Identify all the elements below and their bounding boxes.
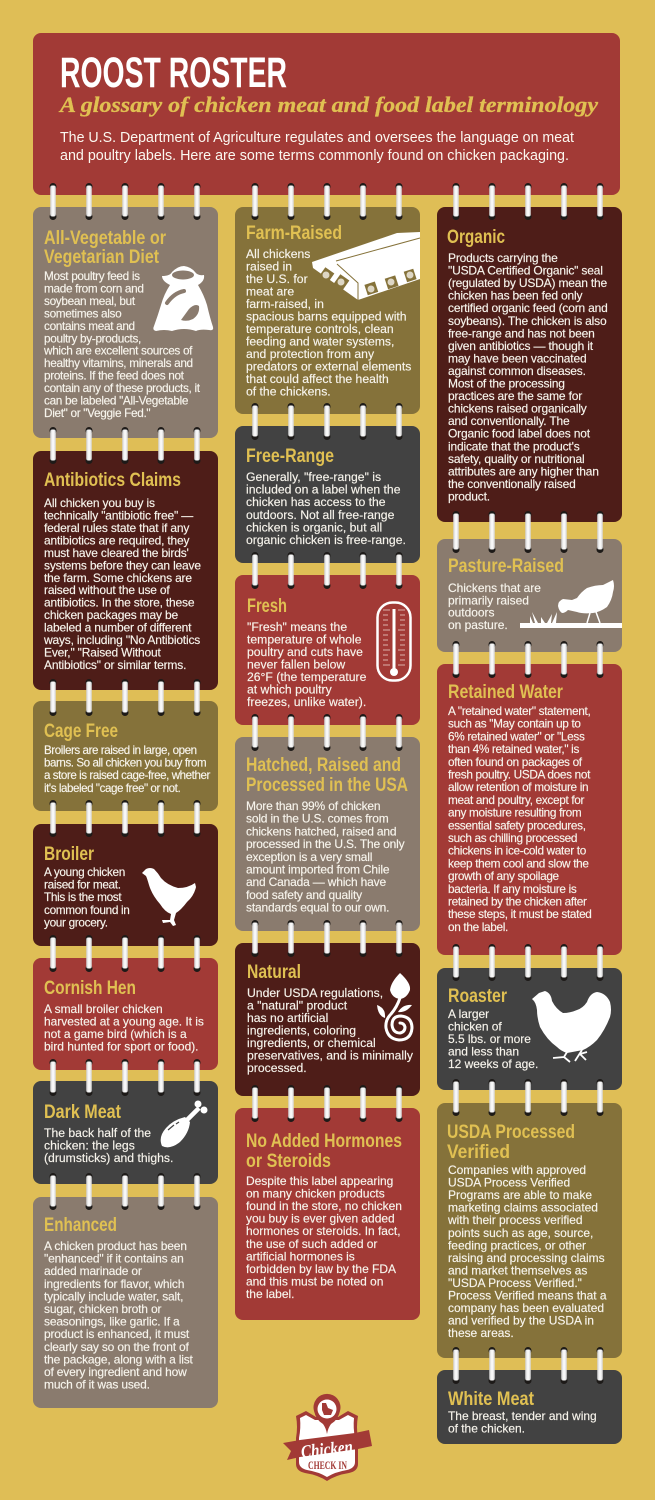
- body text: that could affect the health: [246, 372, 389, 386]
- logo: Chicken Check In: Chicken: [300, 1436, 354, 1462]
- body text: your grocery.: [44, 915, 108, 929]
- body text: Broilers are raised in large, open: [44, 744, 197, 757]
- body text: Products carrying the: [448, 251, 558, 265]
- body text: meat are: [246, 284, 294, 298]
- body text: never fallen below: [247, 658, 345, 672]
- body text: essential safety procedures,: [448, 818, 586, 832]
- body text: these areas.: [448, 1326, 514, 1340]
- body text: primarily raised: [448, 593, 529, 607]
- body text: bacteria. If any moisture is: [448, 882, 577, 896]
- body text: product is enhanced, it must: [44, 1327, 190, 1341]
- body text: contains meat and: [44, 319, 135, 333]
- body text: must have cleared the birds': [44, 546, 189, 560]
- body text: forbidden by law by the FDA: [246, 1262, 396, 1276]
- heading: Vegetarian Diet: [44, 246, 159, 268]
- body text: chickens hatched, raised and: [246, 824, 396, 838]
- body text: given antibiotics — though it: [448, 339, 594, 353]
- body text: This is the most: [44, 890, 122, 904]
- body text: not a game bird (which is a: [44, 1027, 187, 1041]
- body text: antibiotics are required, they: [44, 533, 190, 547]
- body text: USDA Process Verified: [448, 1176, 570, 1190]
- body text: raised in: [246, 260, 292, 274]
- body text: 26°F (the temperature: [247, 670, 367, 684]
- body text: any moisture resulting from: [448, 806, 582, 820]
- body text: and this must be noted on: [246, 1274, 383, 1288]
- heading: Cage Free: [44, 720, 118, 742]
- header panel: [33, 33, 620, 195]
- heading: Organic: [447, 226, 505, 248]
- body text: chicken packages may be: [44, 608, 178, 622]
- body text: and less than: [448, 1044, 519, 1058]
- body text: points such as age, source,: [448, 1226, 593, 1240]
- body text: and protection from any: [246, 347, 375, 361]
- body text: free-range and has not been: [448, 326, 595, 340]
- heading: Broiler: [44, 843, 94, 865]
- heading: Enhanced: [44, 1214, 117, 1236]
- heading: Antibiotics Claims: [44, 469, 181, 491]
- body text: made from corn and: [44, 281, 144, 295]
- body text: Most of the processing: [448, 376, 565, 390]
- body text: chickens raised organically: [448, 402, 587, 416]
- body text: A "retained water" statement,: [448, 704, 590, 718]
- body text: a "natural" product: [247, 998, 348, 1012]
- body text: 5.5 lbs. or more: [448, 1032, 531, 1046]
- body text: company has been evaluated: [448, 1301, 604, 1315]
- body text: Most poultry feed is: [44, 269, 140, 283]
- body text: chicken of: [448, 1020, 502, 1034]
- body text: spacious barns equipped with: [246, 310, 407, 324]
- icon: drumstick: [161, 1100, 208, 1147]
- body text: clearly say so on the front of: [44, 1340, 190, 1354]
- body text: added marinade or: [44, 1264, 142, 1278]
- body text: product.: [448, 489, 490, 503]
- body text: included on a label when the: [246, 483, 401, 497]
- panel: Organic: [437, 207, 622, 522]
- heading: USDA Processed: [447, 1121, 575, 1143]
- panel: Pasture-Raised: [437, 539, 622, 652]
- panel: Free-Range: [235, 426, 420, 563]
- panel: Cornish Hen: [33, 958, 218, 1070]
- icon: roaster chicken: [532, 991, 611, 1062]
- body text: feeding and water systems,: [246, 334, 394, 348]
- heading: White Meat: [448, 1388, 534, 1410]
- panel: Roaster: [437, 968, 622, 1090]
- body text: "USDA Certified Organic" seal: [448, 264, 603, 278]
- body text: antibiotics. In the store, these: [44, 596, 195, 610]
- body text: labeled a number of different: [44, 621, 192, 635]
- body text: than 4% retained water," is: [448, 742, 579, 756]
- body text: on the label.: [448, 920, 508, 934]
- body text: ingredients for flavor, which: [44, 1277, 184, 1291]
- body text: Companies with approved: [448, 1163, 586, 1177]
- body text: harvested at a young age. It is: [44, 1014, 204, 1028]
- body text: has no artificial: [247, 1011, 328, 1025]
- body text: can be labeled "All-Vegetable: [44, 394, 189, 408]
- panel: No Added Hormones or Steroids: [235, 1108, 420, 1320]
- body text: ingredients, coloring: [247, 1024, 356, 1038]
- body text: chicken has access to the: [246, 495, 386, 509]
- body text: ingredients, or chemical: [247, 1036, 376, 1050]
- body text: and market themselves as: [448, 1263, 587, 1277]
- body text: (drumsticks) and thighs.: [44, 1151, 173, 1165]
- body text: Diet" or "Veggie Fed.": [44, 406, 150, 420]
- body text: often found on packages of: [448, 755, 583, 769]
- body text: a store is raised cage-free, whether: [44, 769, 210, 782]
- body text: processed in the U.S. The only: [246, 837, 405, 851]
- body text: indicate that the product's: [448, 439, 580, 453]
- body text: safety, quality or nutritional: [448, 452, 584, 466]
- heading: Pasture-Raised: [448, 555, 564, 577]
- body text: meat and poultry, except for: [448, 793, 585, 807]
- body text: farm-raised, in: [246, 297, 324, 311]
- body text: The back half of the: [44, 1126, 151, 1140]
- icon: grazing hen: [520, 580, 622, 628]
- body text: growth of any spoilage: [448, 869, 560, 883]
- body text: preservatives, and is minimally: [247, 1048, 414, 1062]
- heading: Roaster: [448, 985, 507, 1007]
- body text: "Fresh" means the: [247, 620, 347, 634]
- body text: against common diseases.: [448, 364, 586, 378]
- body text: 12 weeks of age.: [448, 1057, 538, 1071]
- icon: thermometer: [378, 602, 410, 680]
- panel: Antibiotics Claims: [33, 451, 218, 690]
- body text: standards equal to our own.: [246, 901, 389, 915]
- heading: Cornish Hen: [44, 977, 136, 999]
- spiral binding rings: [50, 183, 604, 1384]
- body text: poultry and cuts have: [247, 645, 363, 659]
- body text: sometimes also: [44, 306, 122, 320]
- body text: found in the store, no chicken: [246, 1199, 402, 1213]
- body text: Programs are able to make: [448, 1188, 592, 1202]
- body text: and Canada — which have: [246, 875, 386, 889]
- panel: Dark Meat: [33, 1081, 218, 1184]
- body text: (regulated by USDA) mean the: [448, 276, 608, 290]
- body text: fresh poultry. USDA does not: [448, 768, 591, 782]
- body text: allow retention of moisture in: [448, 780, 588, 794]
- subtitle: A glossary of chicken meat and food label terminology: [58, 92, 598, 117]
- heading: or Steroids: [246, 1150, 331, 1172]
- body text: organic chicken is free-range.: [246, 533, 406, 547]
- body text: predators or external elements: [246, 360, 411, 374]
- body text: these steps, it must be stated: [448, 907, 592, 921]
- body text: technically "antibiotic free" —: [44, 508, 193, 522]
- body text: the farm. Some chickens are: [44, 571, 192, 585]
- body text: temperature of whole: [247, 632, 362, 646]
- body text: A chicken product has been: [44, 1239, 187, 1253]
- body text: at which poultry: [247, 682, 333, 696]
- body text: practices are the same for: [448, 389, 582, 403]
- logo: Chicken Check In: CHECK IN: [308, 1458, 347, 1472]
- body text: Ever," "Raised Without: [44, 646, 161, 660]
- body text: outdoors: [448, 606, 494, 620]
- body text: poultry by-products,: [44, 331, 141, 345]
- body text: such as "May contain up to: [448, 717, 581, 731]
- icon: feed sack: [153, 266, 213, 331]
- panel: Hatched, Raised and Processed in the USA: [235, 737, 420, 931]
- heading: Verified: [447, 1141, 510, 1163]
- panel: Broiler: [33, 824, 218, 946]
- body text: "USDA Process Verified.": [448, 1276, 582, 1290]
- body text: and conventionally. The: [448, 414, 570, 428]
- body text: federal rules state that if any: [44, 521, 189, 535]
- body text: the U.S. for: [246, 272, 308, 286]
- body text: hormones or steroids. In fact,: [246, 1224, 401, 1238]
- body text: healthy vitamins, minerals and: [44, 356, 193, 370]
- body text: "enhanced" if it contains an: [44, 1252, 184, 1266]
- heading: Farm-Raised: [246, 222, 342, 244]
- body text: chicken: the legs: [44, 1138, 135, 1152]
- heading: Free-Range: [246, 445, 334, 467]
- body text: proteins. If the feed does not: [44, 369, 185, 383]
- panel: USDA Processed Verified: [437, 1103, 622, 1358]
- intro text: and poultry labels. Here are some terms commonly found on chicken packaging.: [60, 148, 569, 164]
- body text: the conventionally raised: [448, 477, 576, 491]
- heading: Natural: [247, 961, 301, 983]
- panel: Natural: [235, 943, 420, 1096]
- panel: Fresh: [235, 575, 420, 725]
- icon: plant sprout: [377, 973, 412, 1040]
- body text: bird hunted for sport or food).: [44, 1040, 198, 1054]
- body text: Under USDA regulations,: [247, 986, 383, 1000]
- body text: on pasture.: [448, 618, 508, 632]
- body text: Generally, "free-range" is: [246, 470, 381, 484]
- body text: retained by the chicken after: [448, 894, 587, 908]
- body text: on many chicken products: [246, 1187, 385, 1201]
- body text: temperature controls, clean: [246, 322, 394, 336]
- panel: Enhanced: [33, 1197, 218, 1408]
- body text: chicken has been fed only: [448, 289, 582, 303]
- panel: Retained Water: [437, 664, 622, 955]
- body text: A young chicken: [44, 865, 125, 879]
- panel: Farm-Raised: [235, 207, 420, 414]
- body text: barns. So all chicken you buy from: [44, 757, 206, 770]
- intro text: The U.S. Department of Agriculture regulates and oversees the language on meat: [60, 130, 574, 146]
- body text: Chickens that are: [448, 581, 541, 595]
- body text: of the chickens.: [246, 384, 331, 398]
- body text: All chickens: [246, 247, 310, 261]
- body text: Organic food label does not: [448, 427, 591, 441]
- logo: Chicken Check In: [283, 1394, 372, 1481]
- body text: raising and processing claims: [448, 1251, 605, 1265]
- title: ROOST ROSTER: [60, 49, 287, 97]
- body text: you buy is ever given added: [246, 1212, 395, 1226]
- body text: the label.: [246, 1287, 294, 1301]
- body text: common found in: [44, 903, 130, 917]
- body text: soybeans). The chicken is also: [448, 314, 607, 328]
- body text: food safety and quality: [246, 888, 362, 902]
- body text: attributes are any higher than: [448, 464, 599, 478]
- icon: chicken barn: [312, 232, 420, 300]
- body text: sugar, chicken broth or: [44, 1302, 161, 1316]
- heading: Processed in the USA: [246, 774, 408, 796]
- body text: Process Verified means that a: [448, 1288, 607, 1302]
- panel: White Meat: [437, 1370, 622, 1444]
- body text: exception is a very small: [246, 850, 372, 864]
- body text: amount imported from Chile: [246, 862, 390, 876]
- heading: All-Vegetable or: [44, 227, 166, 249]
- body text: may have been vaccinated: [448, 351, 586, 365]
- body text: outdoors. Not all free-range: [246, 508, 395, 522]
- heading: No Added Hormones: [246, 1130, 402, 1152]
- heading: Hatched, Raised and: [246, 754, 401, 776]
- body text: which are excellent sources of: [43, 344, 193, 358]
- body text: All chicken you buy is: [44, 496, 155, 510]
- body text: much of it was used.: [44, 1378, 150, 1392]
- panel: All-Vegetable or Vegetarian Diet: [33, 207, 218, 438]
- body text: seasonings, like garlic. If a: [44, 1315, 180, 1329]
- panel: Cage Free: [33, 701, 218, 811]
- body text: typically include water, salt,: [44, 1289, 183, 1303]
- icon: broiler chicken: [142, 868, 196, 926]
- body text: of the chicken.: [448, 1422, 525, 1436]
- body text: with their process verified: [447, 1213, 583, 1227]
- body text: contain any of these products, it: [44, 381, 201, 395]
- body text: 6% retained water" or "Less: [448, 729, 585, 743]
- body text: ways, including "No Antibiotics: [43, 633, 200, 647]
- body text: marketing claims associated: [448, 1201, 598, 1215]
- body text: artificial hormones is: [246, 1249, 355, 1263]
- body text: systems before they can leave: [44, 558, 201, 572]
- body text: soybean meal, but: [44, 294, 136, 308]
- body text: A larger: [448, 1007, 489, 1021]
- body text: the use of such added or: [246, 1237, 377, 1251]
- body text: chickens in ice-cold water to: [448, 844, 587, 858]
- body text: The breast, tender and wing: [448, 1409, 597, 1423]
- heading: Fresh: [247, 595, 287, 617]
- body text: the package, along with a list: [44, 1352, 194, 1366]
- body text: More than 99% of chicken: [246, 799, 380, 813]
- body text: and verified by the USDA in: [448, 1314, 594, 1328]
- body text: it's labeled "cage free" or not.: [44, 782, 180, 795]
- body text: Antibiotics" or similar terms.: [44, 658, 186, 672]
- heading: Retained Water: [448, 681, 563, 703]
- body text: A small broiler chicken: [44, 1002, 163, 1016]
- body text: feeding practices, or other: [448, 1238, 586, 1252]
- body text: raised without the use of: [44, 583, 170, 597]
- body text: such as chilling processed: [448, 831, 577, 845]
- body text: Despite this label appearing: [246, 1174, 393, 1188]
- body text: keep them cool and slow the: [448, 856, 589, 870]
- body text: sold in the U.S. comes from: [246, 812, 389, 826]
- body text: raised for meat.: [44, 878, 121, 892]
- body text: certified organic feed (corn and: [448, 301, 608, 315]
- body text: chicken is organic, but all: [246, 520, 382, 534]
- body text: freezes, unlike water).: [247, 695, 366, 709]
- body text: of every ingredient and how: [44, 1365, 187, 1379]
- heading: Dark Meat: [44, 1101, 121, 1123]
- body text: processed.: [247, 1061, 307, 1075]
